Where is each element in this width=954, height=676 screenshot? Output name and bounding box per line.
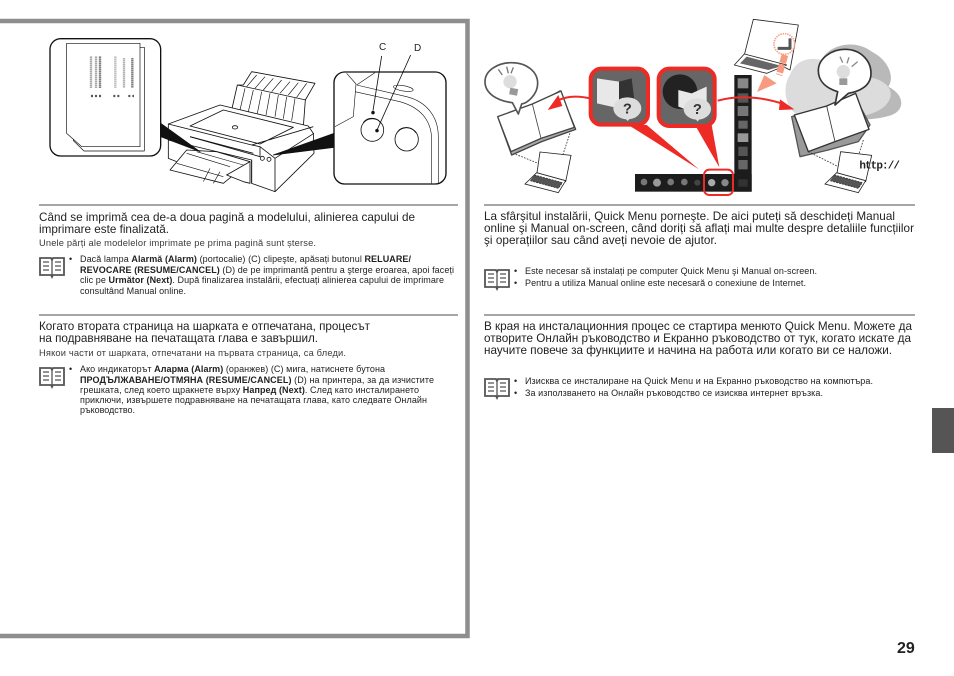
note: Bulgarian: приключи, извършете подравняване на печатащата глава, като следвате Онлайн xyxy=(80,395,427,405)
text block: Bulgarian heading: на подравняване на печатащата глава е завършил. xyxy=(39,332,318,345)
icon: manual book xyxy=(485,270,509,289)
text block: Romanian heading xyxy=(39,211,415,236)
note: Romanian: REVOCARE (RESUME/CANCEL) (D) de pe imprimantă pentru a şterge eroarea, apoi faceți xyxy=(80,265,454,275)
note: Romanian: consultând Manual online. xyxy=(80,286,186,296)
note: Romanian bullets xyxy=(514,266,817,288)
note: Bulgarian: грешката, след което щракнете върху Напред (Next). След като инсталирането xyxy=(80,385,419,395)
label C: C xyxy=(379,42,386,53)
page number: 29 xyxy=(897,640,915,657)
text block: Romanian heading: imprimare este finalizată. xyxy=(39,223,169,236)
label arrows xyxy=(373,55,411,129)
Quick Menu illustration xyxy=(485,19,901,195)
text block: Bulgarian paragraph: В края на инсталационния процес се стартира менюто Quick Menu. Можете да xyxy=(484,320,912,333)
section tab xyxy=(932,408,954,453)
red arrow left xyxy=(555,97,590,102)
text block: Romanian heading: Când se imprimă cea de-a doua pagină a modelului, alinierea capului de xyxy=(39,211,415,224)
http label: http:// xyxy=(859,160,900,172)
text block: Bulgarian paragraph: отворите Онлайн ръководство и Екранно ръководство от тук, когато искате да xyxy=(484,332,911,345)
note: Bulgarian: Ако индикаторът Аларма (Alarm) (оранжев) (C) мига, натиснете бутона xyxy=(80,364,385,374)
callout wedges xyxy=(161,123,200,152)
note: Bulgarian: ръководство. xyxy=(80,405,135,415)
note: Romanian bullets: • xyxy=(514,266,517,276)
label D: D xyxy=(414,43,421,54)
icon: Manual online xyxy=(659,69,715,126)
icon: manual book xyxy=(40,258,64,277)
note: Romanian bullets: • xyxy=(514,278,517,288)
left laptop xyxy=(525,152,571,193)
inset: buttons C and D xyxy=(334,72,446,184)
icon: Manual online: ? xyxy=(693,102,702,118)
icon: Manual on-screen: ? xyxy=(623,101,632,117)
red highlight xyxy=(704,170,733,195)
note: Romanian bullets: Este necesar să instalați pe computer Quick Menu şi Manual on-screen. xyxy=(525,266,817,276)
note: Romanian bullets: Pentru a utiliza Manual online este necesară o conexiune de Internet. xyxy=(525,278,806,288)
note: Romanian: • xyxy=(69,254,72,264)
text block: Romanian paragraph: La sfârşitul instalării, Quick Menu porneşte. De aici puteți să deschideți Manual xyxy=(484,210,895,223)
left page frame xyxy=(0,21,468,636)
top laptop with salmon arrow xyxy=(734,19,798,92)
note: Bulgarian bullets: • xyxy=(514,376,517,386)
note: Romanian xyxy=(69,254,454,296)
text block: Romanian paragraph xyxy=(484,210,914,247)
note: Bulgarian bullets xyxy=(514,376,873,398)
note: Bulgarian: ПРОДЪЛЖАВАНЕ/ОТМЯНА (RESUME/CANCEL) (D) на принтера, за да изчистите xyxy=(80,375,434,385)
text block: Romanian subtext: Unele părți ale modelelor imprimate pe prima pagină sunt șterse. xyxy=(39,238,316,248)
printer illustration xyxy=(50,39,446,192)
note: Romanian: Dacă lampa Alarmă (Alarm) (portocalie) (C) clipeşte, apăsați butonul RELUARE/ xyxy=(80,254,411,264)
printer body xyxy=(168,72,315,192)
red arrow right xyxy=(718,97,783,104)
text block: Bulgarian heading xyxy=(39,320,371,345)
text block: Bulgarian paragraph xyxy=(484,320,912,357)
text block: Bulgarian subtext: Някои части от шарката, отпечатани на първата страница, са бледи. xyxy=(39,348,346,358)
note: Bulgarian: • xyxy=(69,364,72,374)
right laptop xyxy=(825,152,872,193)
icon: manual book xyxy=(40,368,64,387)
cloud xyxy=(785,44,901,120)
note: Bulgarian bullets: Изисква се инсталиране на Quick Menu и на Екранно ръководство на компютъра. xyxy=(525,376,873,386)
text block: Romanian paragraph: online şi Manual on-screen, când doriți să aflați mai multe despre detaliile funcțiilor xyxy=(484,222,914,235)
left book with bulb xyxy=(485,63,576,167)
text block: Romanian paragraph: şi operațiilor sau când aveți nevoie de ajutor. xyxy=(484,234,717,247)
right book with bulb xyxy=(792,49,871,167)
callout pointers xyxy=(628,125,699,169)
icon: Manual on-screen xyxy=(591,69,648,125)
note: Bulgarian bullets: • xyxy=(514,388,517,398)
Quick Menu toolbar xyxy=(635,75,752,195)
note: Bulgarian bullets: За използването на Онлайн ръководство се изисква интернет връзка. xyxy=(525,388,823,398)
note: Romanian: clic pe Următor (Next). După finalizarea instalării, efectuați alinierea capului de imprimare xyxy=(80,275,444,285)
text block: Bulgarian paragraph: научите повече за функциите и начина на работа или когато ви се наложи. xyxy=(484,344,892,357)
note: Bulgarian xyxy=(69,364,434,415)
text block: Bulgarian heading: Когато втората страница на шарката е отпечатана, процесът xyxy=(39,320,371,333)
icon: manual book xyxy=(485,379,509,398)
inset: printed pattern page xyxy=(50,39,161,156)
divider xyxy=(39,205,915,315)
